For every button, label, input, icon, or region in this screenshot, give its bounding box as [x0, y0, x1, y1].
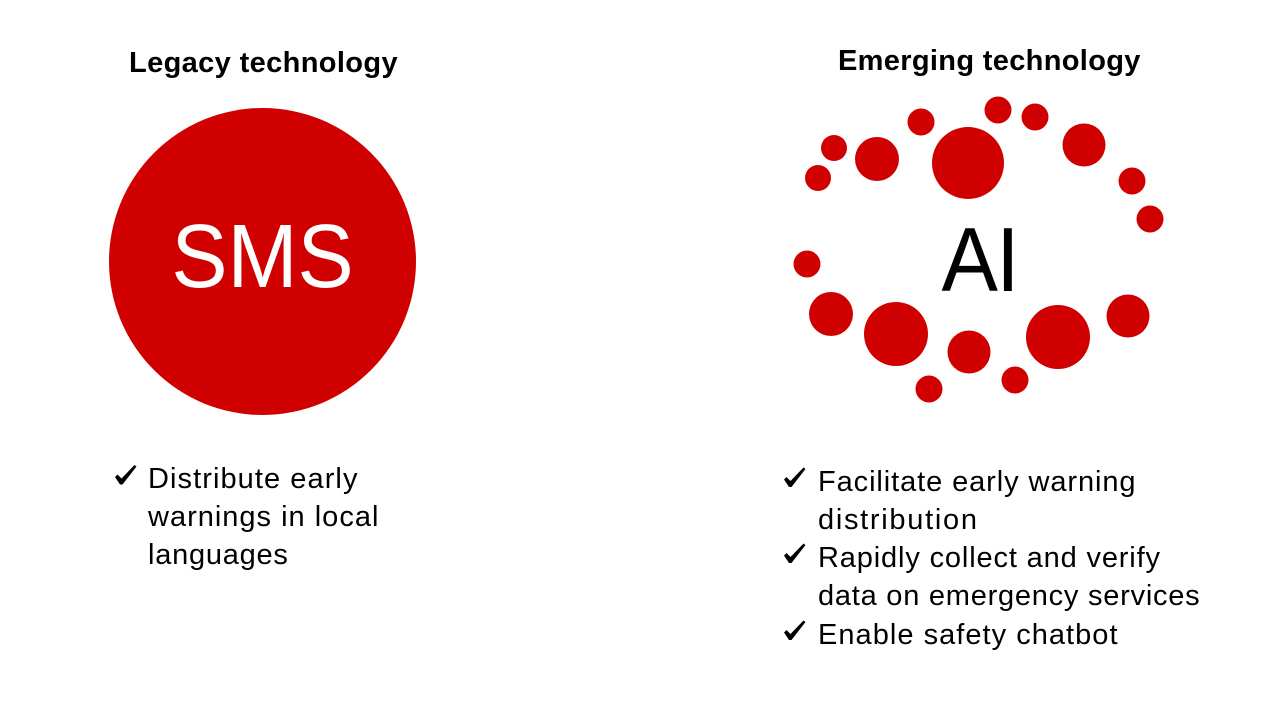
- text: bullet 3: Enable safety chatbot: [818, 619, 1119, 651]
- heading: emerging technology: Emerging technology: [838, 45, 1141, 77]
- icon: check mark 1: [784, 468, 806, 487]
- text: bullet 2: [818, 542, 1200, 612]
- icon: SMS circle: SMS: [171, 206, 354, 307]
- icon: check mark: [115, 465, 136, 484]
- icon: AI dot ring: AI: [942, 208, 1018, 311]
- text: bullet 2: Rapidly collect and verify: [818, 542, 1161, 574]
- text: bullet 1: [818, 466, 1136, 536]
- icon: check mark 2: [784, 544, 806, 563]
- text: legacy bullet: Distribute early: [148, 463, 359, 495]
- text: legacy bullet: [148, 463, 379, 571]
- text: bullet 1: distribution: [818, 504, 979, 536]
- text: bullet 2: data on emergency services: [818, 580, 1200, 612]
- list: emerging benefits: [784, 466, 1200, 651]
- heading: legacy technology: Legacy technology: [129, 47, 398, 79]
- text: legacy bullet: languages: [148, 539, 289, 571]
- list: legacy benefits: [115, 463, 379, 571]
- text: legacy bullet: warnings in local: [148, 501, 379, 533]
- text: bullet 1: Facilitate early warning: [818, 466, 1136, 498]
- icon: check mark 3: [784, 620, 806, 640]
